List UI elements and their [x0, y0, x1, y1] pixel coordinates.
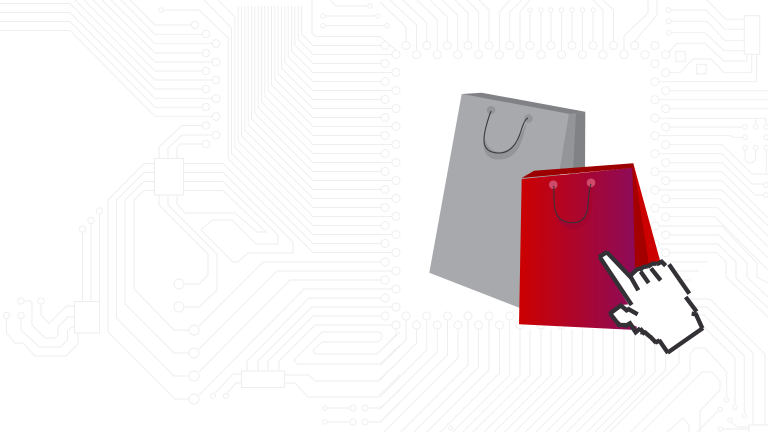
traces: chip lower loops — [159, 195, 217, 307]
chip: small left — [74, 302, 100, 333]
chip: upper right — [744, 16, 760, 54]
traces: bottom row diagonals — [380, 320, 679, 432]
grey bag handle — [484, 111, 528, 153]
red bag handle — [554, 184, 591, 223]
pads: right columns — [651, 60, 768, 431]
red bag top strip — [522, 163, 633, 178]
pads: left and centre columns — [3, 4, 389, 425]
traces: lower right octagons — [631, 299, 765, 432]
grey bag front — [429, 94, 570, 310]
traces: central bus to right column — [204, 0, 396, 244]
grey shopping bag — [429, 93, 585, 310]
traces: right column — [659, 91, 768, 317]
pads: column at x385 and x396 — [381, 42, 400, 329]
traces: top row diagonals — [380, 0, 657, 50]
traces: small chip connections — [6, 214, 100, 356]
traces: bottom terminals — [327, 390, 400, 422]
red bag bright side — [633, 163, 661, 270]
traces: chip right connections — [177, 164, 392, 262]
traces: snake loop — [294, 332, 400, 364]
red bag dark side — [631, 163, 649, 272]
traces: chip left connections — [108, 164, 189, 399]
square pads — [676, 52, 706, 74]
red bag handle shadow — [556, 188, 593, 229]
hand outline — [599, 252, 703, 353]
traces: lower chip connections — [215, 298, 400, 397]
traces: upper small terminals — [323, 0, 387, 26]
hand fill — [599, 252, 702, 352]
pads: top rows — [402, 8, 671, 59]
chip: lower middle — [242, 371, 284, 388]
hand cursor icon — [599, 252, 703, 353]
chip: upper left — [154, 158, 184, 195]
red bag grommets — [549, 178, 595, 189]
red bag front — [519, 168, 637, 330]
grey bag top strip — [462, 93, 585, 114]
traces: mid diagonals to lower circles — [199, 262, 392, 395]
finger separators — [630, 268, 661, 290]
pads: bottom rows — [402, 312, 566, 430]
traces: top-left bus — [0, 0, 228, 116]
grey bag side panel — [570, 112, 585, 174]
traces: upper right chip — [659, 0, 757, 82]
grey bag handle shadow — [483, 122, 527, 160]
chip: bottom right corner — [749, 425, 768, 432]
red shopping bag — [519, 163, 661, 330]
traces: chip upper connections — [159, 126, 212, 158]
grey bag grommets — [487, 106, 533, 123]
grey bag inner fold — [559, 113, 576, 174]
